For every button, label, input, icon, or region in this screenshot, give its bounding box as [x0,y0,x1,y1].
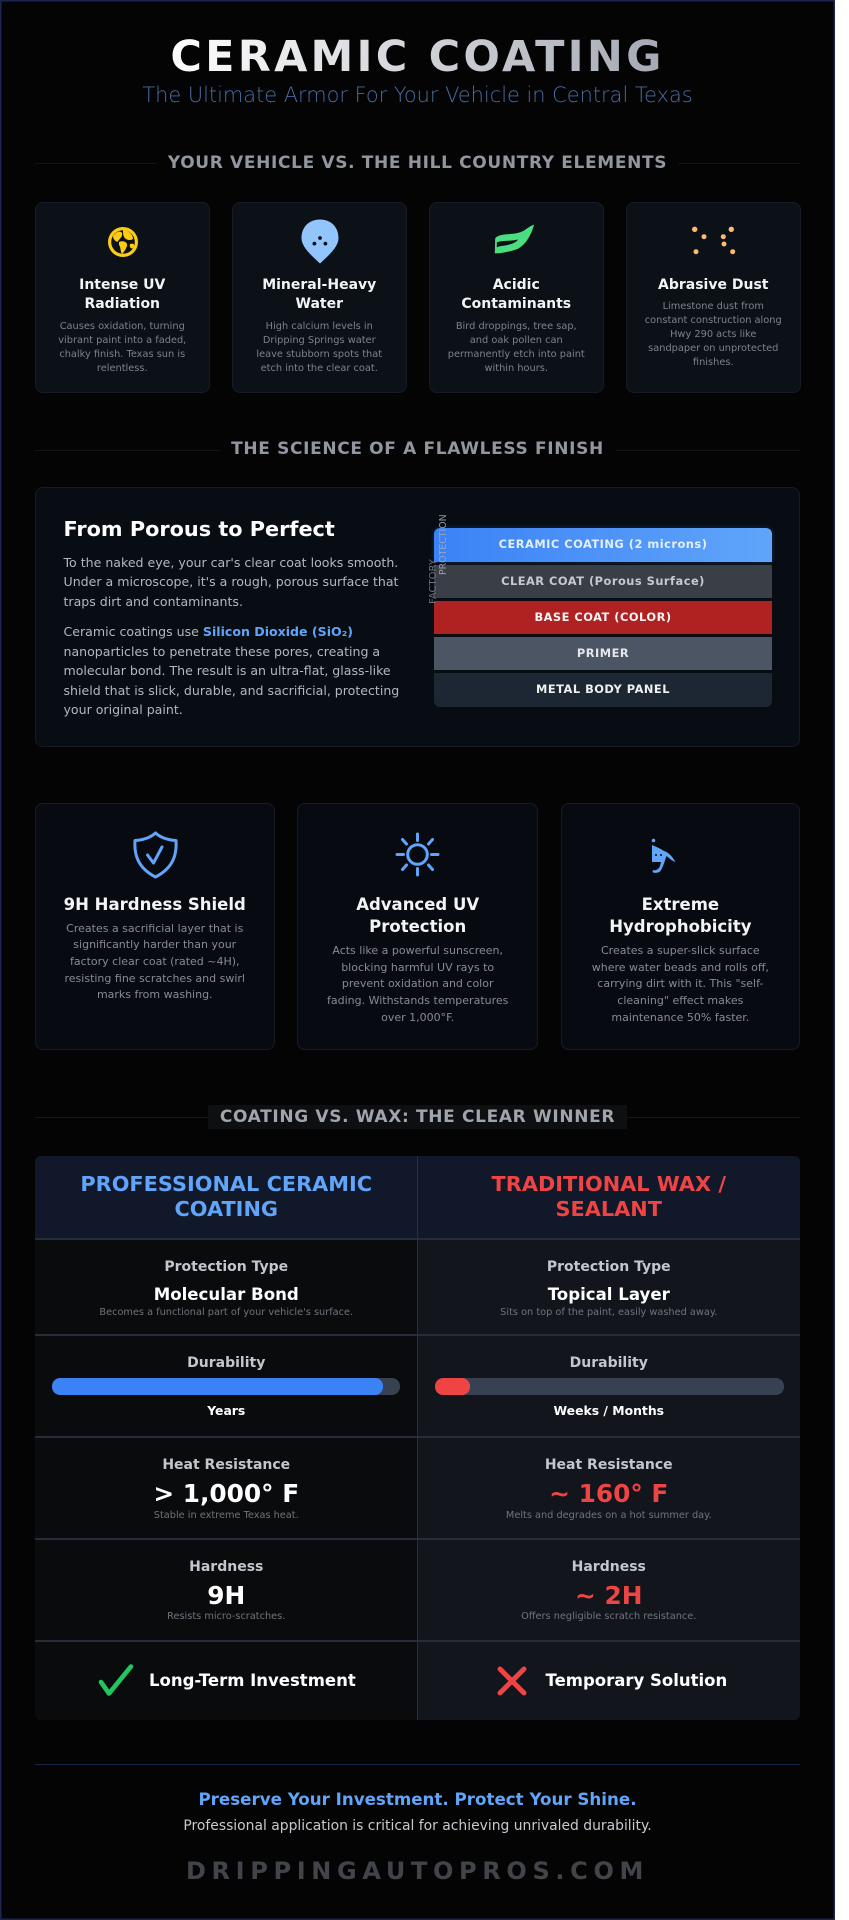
row: verdict, wax [418,1641,800,1720]
card text: constant construction along [645,315,782,326]
card text: Causes oxidation, turning [60,321,185,332]
card text: Creates a super-slick surface [601,944,760,957]
card text: prevent oxidation and color [342,977,494,990]
row: durability, wax: Weeks / Months [553,1403,664,1418]
layer: primer: PRIMER [577,646,629,660]
row: heat resistance, ceramic: Heat Resistance [162,1457,290,1473]
card title: 9H Hardness Shield [64,895,246,914]
comparison table [35,1156,800,1720]
card title: Intense UV [79,276,165,292]
card text: Acts like a powerful sunscreen, [332,944,503,957]
card text: etch into the clear coat. [261,363,378,374]
card title: Abrasive Dust [658,276,768,292]
card title: Extreme [642,895,719,914]
row: protection type, wax: Topical Layer [548,1284,670,1304]
card: 9H hardness shield [35,803,274,1050]
card title: Acidic [493,276,540,292]
row: hardness, ceramic: 9H [207,1581,245,1610]
card title: Mineral-Heavy [262,276,376,292]
text block: naked eye: traps dirt and contaminants. [64,594,243,609]
card text: permanently etch into paint [448,349,585,360]
row: durability, ceramic: Durability [187,1355,265,1371]
row: hardness, wax: Offers negligible scratch resistance. [521,1611,696,1622]
card text: fading. Withstands temperatures [327,994,508,1007]
card: extreme hydrophobicity [561,803,800,1050]
card title: Water [296,296,343,312]
card text: factory clear coat (rated ~4H), [70,955,240,968]
label: factory: FACTORY [428,559,439,604]
row: protection type, wax: Protection Type [547,1259,671,1275]
text block: silicon dioxide: shield that is slick, durable, and sacrificial, protecting [64,683,399,698]
row: hardness, ceramic: Hardness [189,1559,263,1575]
text block: silicon dioxide [64,624,399,717]
panel: from porous to perfect [35,487,800,747]
row: protection type, wax: Sits on top of the paint, easily washed away. [500,1307,717,1318]
icon: dust particles [692,226,736,254]
card title: Radiation [84,296,160,312]
text block: silicon dioxide: Ceramic coatings use Silicon Dioxide (SiO₂) [64,624,353,639]
card text: chalky finish. Texas sun is [59,349,185,360]
layer: base coat: BASE COAT (COLOR) [534,610,672,624]
row: verdict, ceramic: Long-Term Investment [149,1671,356,1690]
header: professional ceramic coating: COATING [174,1197,278,1221]
icon: green leaf [494,224,534,254]
card title: Hydrophobicity [609,917,751,936]
subtitle: The Ultimate Armor For Your Vehicle in Central Texas [142,83,693,107]
card title: Contaminants [461,296,571,312]
card: intense UV radiation [35,202,210,393]
card text: cleaning" effect makes [617,994,743,1007]
layer: base coat [434,601,772,634]
card text: Bird droppings, tree sap, [456,321,577,332]
icon: sun [396,832,440,876]
card: advanced UV protection [297,803,538,1050]
row: heat resistance, ceramic: > 1,000° F [153,1479,299,1508]
row: hardness, wax [418,1539,800,1641]
footer [35,1764,800,1885]
icon: water drop [302,220,338,264]
card title [79,276,166,312]
header: traditional wax: SEALANT [556,1197,662,1221]
icon: shield with check [133,831,178,878]
row: heat resistance, wax: Heat Resistance [545,1457,673,1473]
card text: blocking harmful UV rays to [341,960,494,974]
card text: over 1,000°F. [381,1011,454,1024]
panel heading: From Porous to Perfect [64,517,335,541]
card text: where water beads and rolls off, [592,960,769,974]
row: hardness, wax: ~ 2H [575,1581,642,1610]
card title [461,276,571,312]
row: protection type, ceramic: Becomes a functional part of your vehicle's surface. [99,1307,353,1318]
card text: carrying dirt with it. This "self- [597,977,763,990]
section heading: science: THE SCIENCE OF A FLAWLESS FINISH [231,438,604,458]
layer: clear coat: CLEAR COAT (Porous Surface) [501,574,705,588]
section heading: coating vs wax [35,1105,800,1129]
row: protection type, ceramic [35,1239,418,1335]
text block: silicon dioxide: molecular bond. The result is an ultra-flat, glass-like [64,663,391,678]
card text: leave stubborn spots that [256,349,382,360]
text block: naked eye: To the naked eye, your car's clear coat looks smooth. [64,555,398,570]
text block: silicon dioxide: nanoparticles to penetrate these pores, creating a [64,644,380,659]
card text [645,301,782,368]
section heading: hill country elements: YOUR VEHICLE VS. THE HILL COUNTRY ELEMENTS [168,153,667,173]
card text: relentless. [97,363,148,374]
card text [58,321,186,374]
layer: ceramic coating: CERAMIC COATING (2 microns) [499,537,707,551]
header: traditional wax: TRADITIONAL WAX / [492,1172,726,1196]
row: heat resistance, ceramic: Stable in extreme Texas heat. [154,1510,299,1521]
card text: significantly harder than your [73,938,236,951]
row: durability, ceramic: Years [207,1403,245,1418]
text block: naked eye [63,555,398,609]
panel: benefit cards [35,803,800,1050]
card text: Creates a sacrificial layer that is [66,922,243,934]
card text: finishes. [693,357,734,368]
footer text: Professional application is critical for achieving unrivaled durability. [183,1818,652,1834]
row: durability, wax [418,1335,800,1437]
card text [64,922,245,1001]
icon: water beading [652,838,676,873]
card text: Limestone dust from [663,301,764,312]
card text: vibrant paint into a faded, [58,335,186,346]
row: protection type, ceramic: Protection Type [164,1259,288,1275]
card text: sandpaper on unprotected [648,343,778,354]
header: traditional wax [418,1156,800,1239]
layer: primer [434,637,772,670]
title: CERAMIC COATING [170,32,665,82]
card title: Protection [369,917,466,936]
row: heat resistance, ceramic [35,1437,418,1539]
row: heat resistance, wax: ~ 160° F [549,1479,668,1508]
row: durability, ceramic [35,1335,418,1437]
layer: clear coat [434,565,772,598]
card: abrasive dust [626,202,800,393]
row: hardness, wax: Hardness [572,1559,646,1575]
row: verdict, wax: Temporary Solution [546,1671,727,1690]
card title: Advanced UV [356,895,479,914]
card text: resisting fine scratches and swirl [64,972,245,985]
card: acidic contaminants [429,202,604,393]
row: protection type, ceramic: Molecular Bond [154,1284,299,1304]
section heading: coating vs wax: COATING VS. WAX: THE CLEAR WINNER [220,1106,615,1126]
layer: metal body panel [434,673,772,707]
layer: metal body panel: METAL BODY PANEL [536,682,670,696]
bar chart: ceramic durability [52,1378,400,1395]
footer headline: Preserve Your Investment. Protect Your Shine. [198,1789,637,1809]
card text [256,321,382,374]
card text: marks from washing. [97,988,213,1001]
card title [609,895,752,936]
bar chart: wax durability [435,1378,784,1395]
card text: maintenance 50% faster. [611,1011,749,1024]
text block: silicon dioxide: your original paint. [64,702,183,717]
card title [262,276,376,312]
card text: Dripping Springs water [263,335,376,346]
row: hardness, ceramic: Resists micro-scratches. [167,1611,285,1622]
layer: ceramic coating [434,528,772,562]
label: protection: PROTECTION [438,515,449,575]
row: protection type, wax [418,1239,800,1335]
header: professional ceramic coating [35,1156,418,1239]
card: mineral-heavy water [232,202,406,393]
row: durability, wax: Durability [570,1355,648,1371]
row: heat resistance, wax [418,1437,800,1539]
chart: paint layer stack [431,525,775,707]
card text: within hours. [484,363,548,374]
card text [448,321,585,374]
panel: threat cards [35,202,801,393]
text block: naked eye: Under a microscope, it's a rough, porous surface that [64,574,398,589]
row: heat resistance, wax: Melts and degrades on a hot summer day. [506,1510,712,1521]
website: DRIPPINGAUTOPROS.COM [186,1857,649,1885]
icon: green check [98,1664,134,1696]
row: hardness, ceramic [35,1539,418,1641]
header: professional ceramic coating: PROFESSIONAL CERAMIC [80,1172,372,1196]
card text: and oak pollen can [470,335,563,346]
icon: red cross [498,1666,526,1696]
card text: Hwy 290 acts like [670,329,756,340]
card text [327,944,508,1024]
icon: yellow globe [108,227,138,257]
row: verdict, ceramic [35,1641,418,1720]
card text [592,944,769,1024]
card text: High calcium levels in [266,321,373,332]
card title [356,895,479,936]
